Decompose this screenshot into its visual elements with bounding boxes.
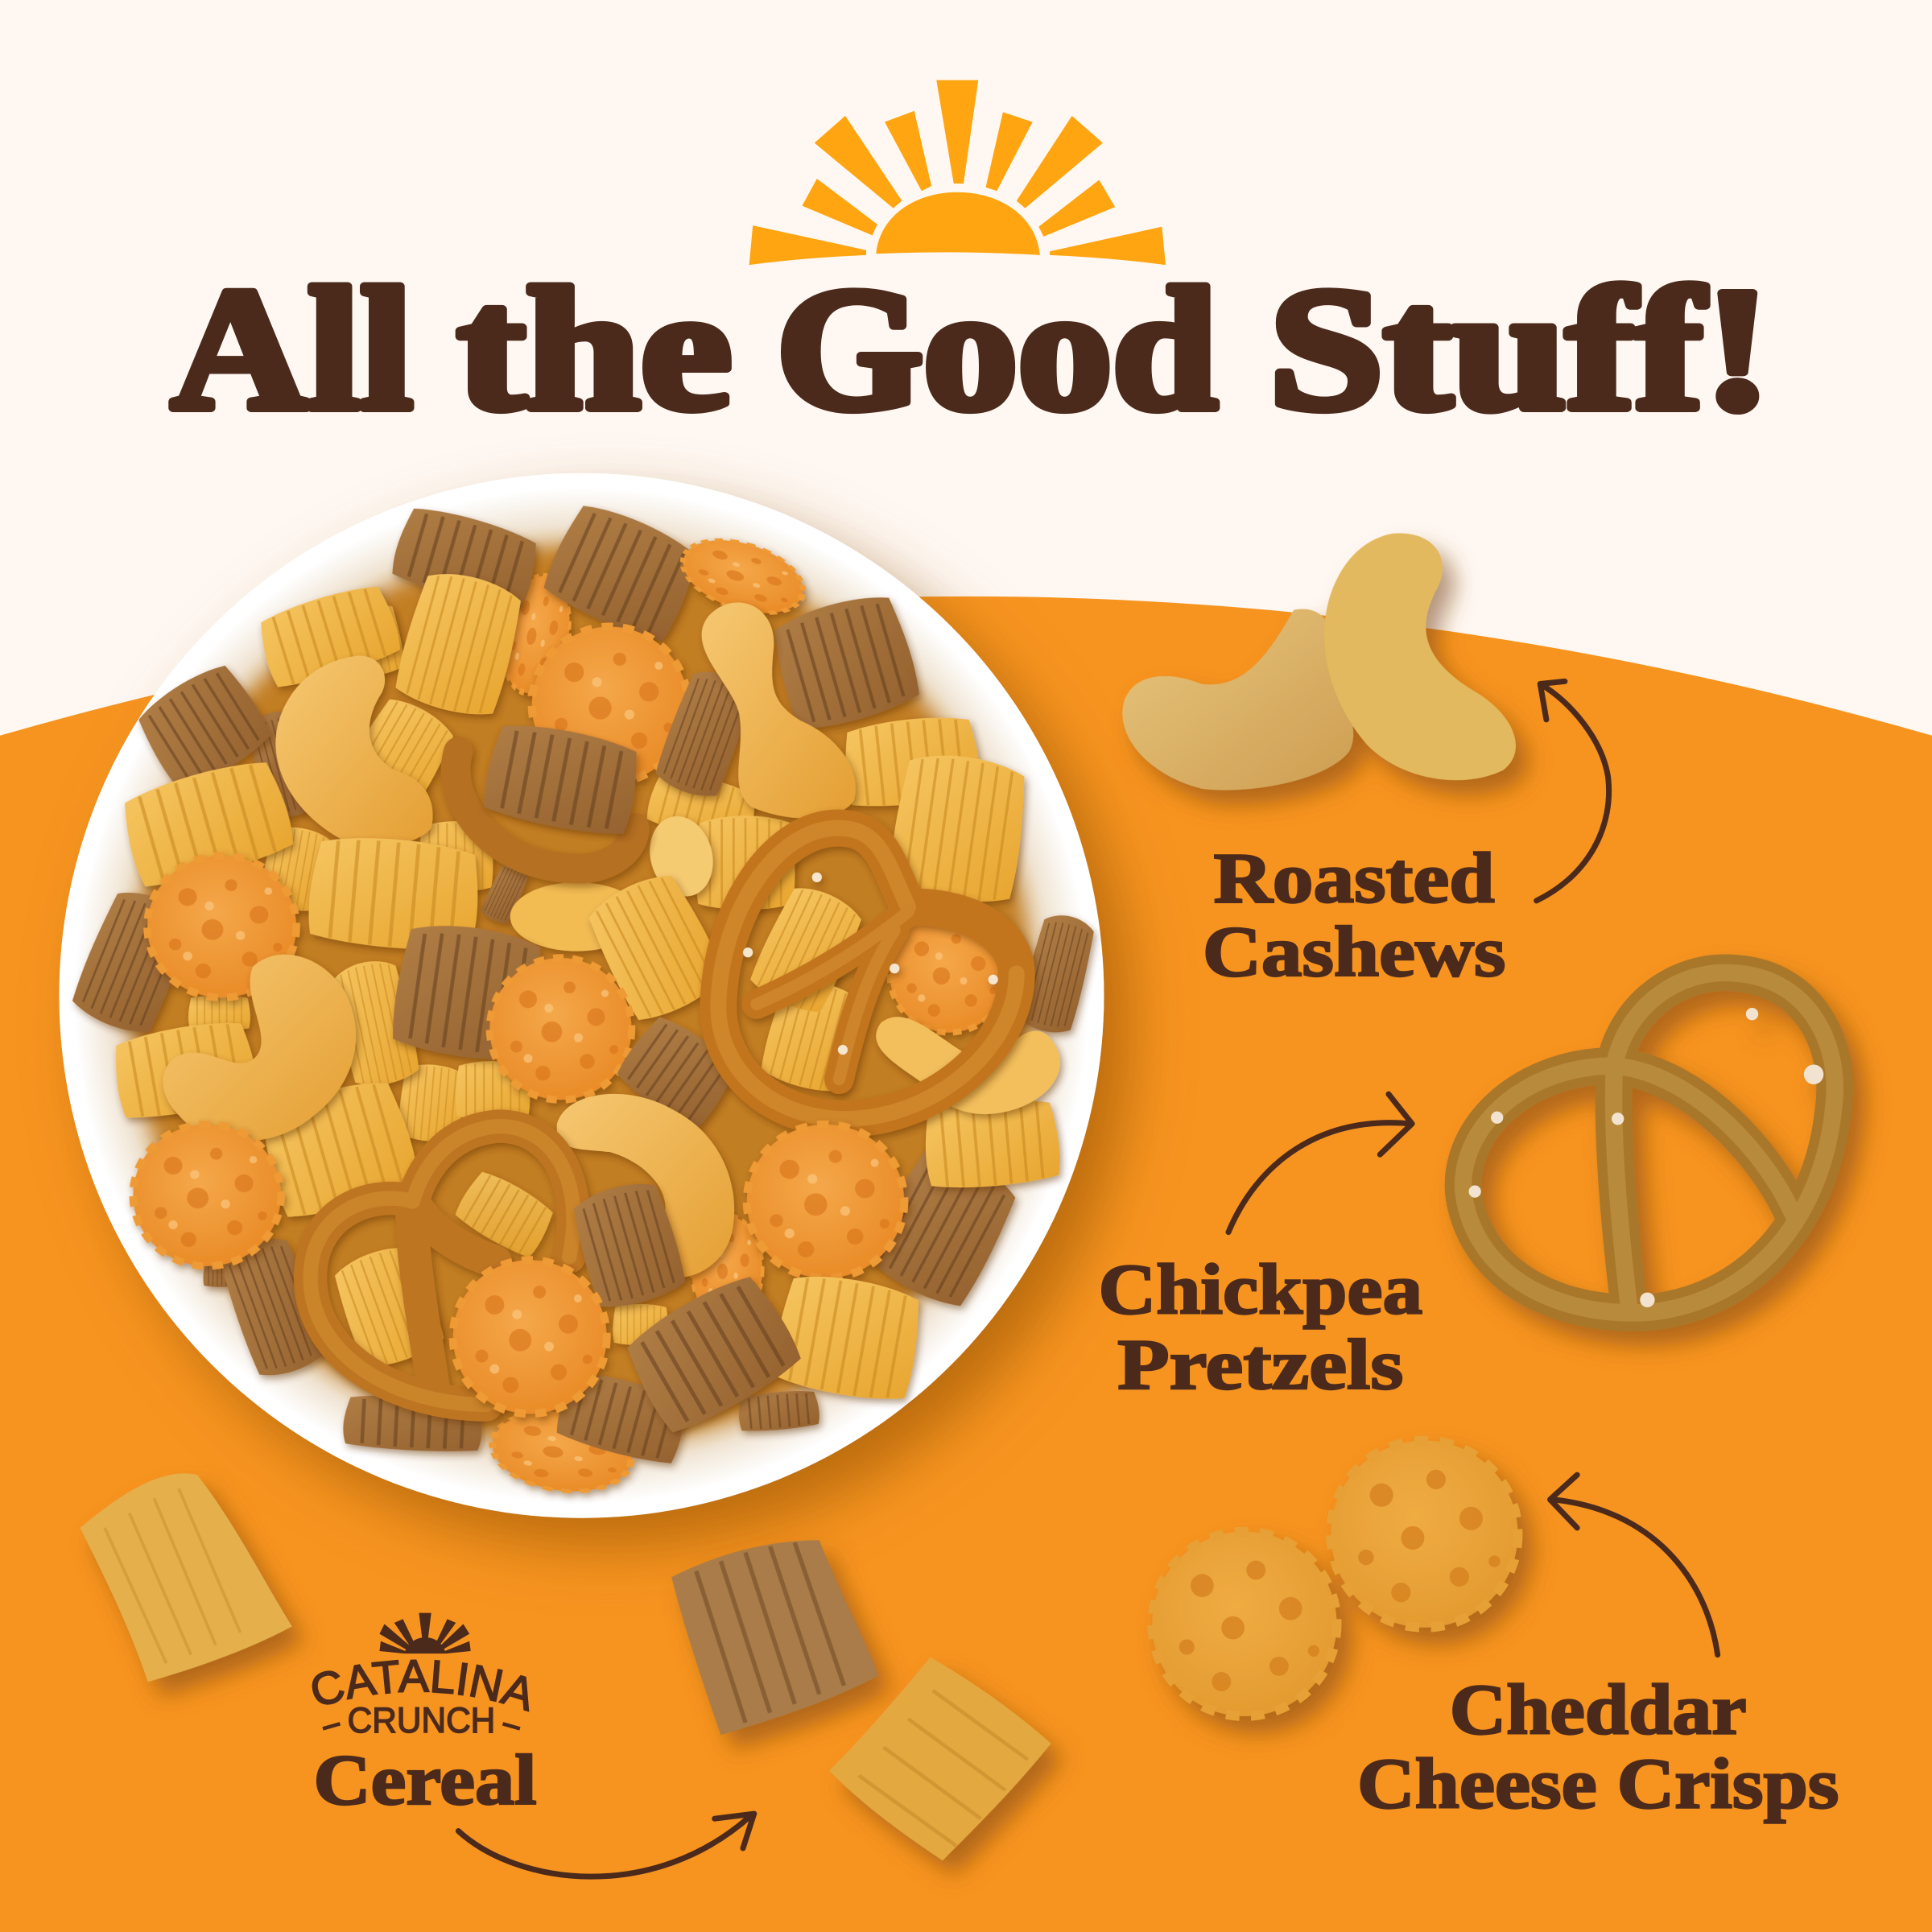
title xyxy=(171,253,1772,447)
title: Stuff! xyxy=(1269,253,1772,447)
cheddar crisps, lower xyxy=(133,1125,904,1373)
cashew right xyxy=(1324,533,1516,780)
large pretzel xyxy=(718,828,1017,1119)
snack mix in bowl xyxy=(68,496,1098,1500)
orange hill panel xyxy=(0,597,1932,1932)
half cashew, right xyxy=(876,1017,1060,1114)
middle cereal and crisps xyxy=(254,832,743,1225)
cashew, centre xyxy=(557,1094,734,1278)
arrow: to cashews xyxy=(1537,681,1609,901)
cashew, upper right xyxy=(702,602,856,819)
label: Chickpea Pretzels: Chickpea xyxy=(1099,1251,1422,1330)
label: Cereal: Cereal xyxy=(314,1741,537,1820)
cheddar crisps, upper xyxy=(147,627,758,997)
label: Chickpea Pretzels xyxy=(1099,1251,1422,1405)
brand logo: Catalina Crunch xyxy=(312,1613,530,1740)
brown cereal pieces xyxy=(130,496,924,798)
label: Cheddar Cheese Crisps xyxy=(1357,1671,1839,1823)
label: Roasted Cashews: Roasted xyxy=(1214,839,1495,918)
label: Chickpea Pretzels: Pretzels xyxy=(1117,1326,1403,1405)
cereal: loose gold piece left xyxy=(80,1473,292,1682)
title: Good xyxy=(776,253,1217,447)
brand logo: Catalina Crunch: CATALINA xyxy=(312,1660,530,1712)
cheddar crisps: loose pair xyxy=(1152,1441,1517,1716)
front cereal and crisps xyxy=(453,1175,926,1440)
label: Cheddar Cheese Crisps: Cheese Crisps xyxy=(1357,1744,1839,1823)
brand logo: Catalina Crunch: CRUNCH xyxy=(348,1701,495,1740)
arrow: to pretzel xyxy=(1228,1094,1412,1232)
pretzel: loose xyxy=(1463,972,1835,1313)
bowl xyxy=(59,473,1104,1518)
label: Roasted Cashews: Cashews xyxy=(1203,913,1505,992)
small pretzel xyxy=(311,1126,573,1405)
bowl rim xyxy=(59,473,1104,1518)
logo wordmark xyxy=(316,1691,532,1713)
gold cereal pieces xyxy=(109,564,1062,1191)
back layer of cereal and crisps xyxy=(68,571,1098,1500)
bowl inner xyxy=(74,488,1089,1503)
cashew, left xyxy=(163,955,356,1141)
small cashew halves xyxy=(510,809,721,952)
curved pretzel under brown piece xyxy=(456,752,634,869)
label: Cheddar Cheese Crisps: Cheddar xyxy=(1450,1671,1747,1750)
cashew, upper left xyxy=(275,655,433,847)
cereal: loose brown piece xyxy=(671,1540,878,1735)
icon: sun logo xyxy=(749,80,1166,265)
label: Roasted Cashews xyxy=(1203,839,1505,992)
title: the xyxy=(457,253,732,447)
cashew left xyxy=(1122,609,1353,791)
cereal: loose gold piece right xyxy=(829,1657,1051,1860)
logo sun xyxy=(379,1613,471,1653)
title: All xyxy=(171,253,413,447)
arrow: to cereal xyxy=(458,1814,754,1876)
arrow: to crisps xyxy=(1550,1475,1718,1655)
cashews: loose pair xyxy=(1122,533,1516,791)
